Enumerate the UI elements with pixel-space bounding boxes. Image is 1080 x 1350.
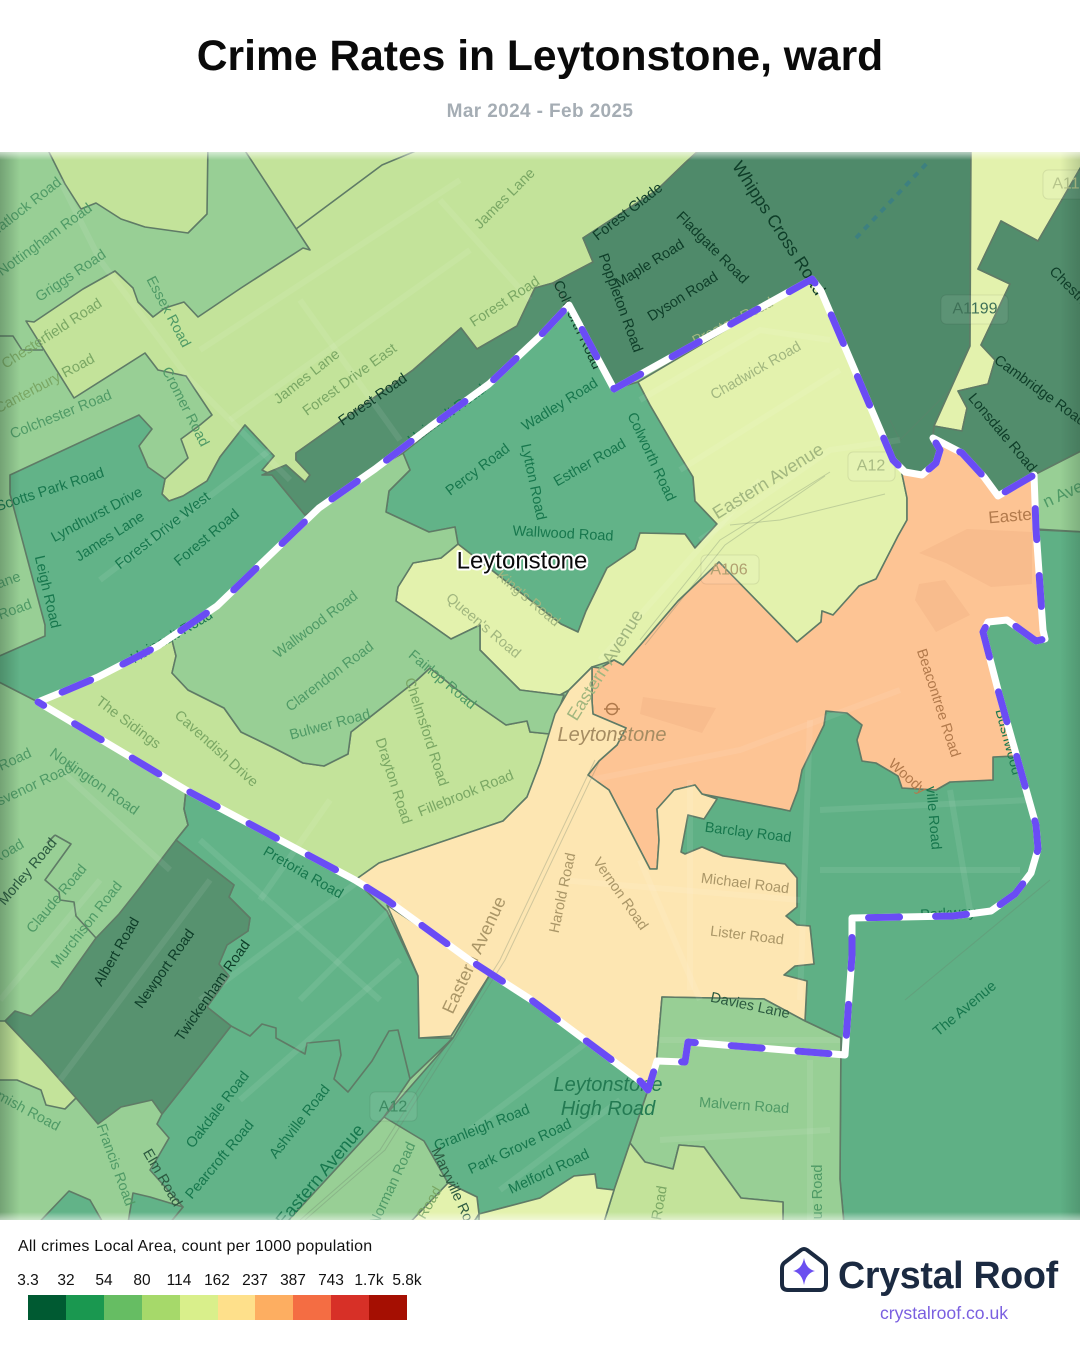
road labels ward north: Chadwick Road — [708, 339, 804, 403]
road labels ward north: Whipps Cross Road — [728, 157, 830, 299]
area: top-right dark Cambridge Road — [933, 160, 1080, 496]
road labels north west: Lyndhurst Drive — [49, 484, 145, 546]
legend scale labels: 5.8k — [392, 1272, 422, 1289]
legend scale labels: 114 — [167, 1272, 191, 1289]
road labels south west: Albert Road — [91, 915, 143, 989]
area: dark Albert Road block — [5, 840, 250, 1124]
legend scale labels: 32 — [57, 1272, 75, 1289]
area: east green — [681, 530, 1080, 1235]
road labels ward north: Wadley Road — [519, 375, 601, 435]
road labels north west: Forest Drive West — [112, 489, 214, 573]
road labels ward north: Maple Road — [613, 236, 687, 292]
road labels south west: Granleigh Road — [432, 1102, 532, 1154]
road labels ward north: Hainault Road — [405, 382, 489, 448]
road labels south east: The Avenue — [930, 978, 1000, 1040]
road labels south west: Road — [414, 1184, 446, 1222]
road labels south west: Claude Road — [24, 861, 90, 937]
station label: Leytonstone High Road: Leytonstone — [554, 1074, 662, 1096]
icon: tube station — [604, 704, 620, 714]
legend scale labels: 80 — [133, 1272, 151, 1289]
road labels north west: Cromer Road — [158, 365, 212, 449]
brand name: Crystal Roof — [838, 1254, 1058, 1296]
title: Crime Rates in Leytonstone, ward — [197, 32, 883, 80]
road labels ward north: Percy Road — [443, 441, 513, 499]
road labels south east: Beacontree Road — [913, 647, 963, 759]
road labels north west: Griggs Road — [33, 247, 109, 305]
road labels ward south west: Bulwer Road — [288, 707, 372, 743]
road labels ward north: Forest Glade — [590, 180, 666, 244]
base area: mid-green areas — [0, 152, 1080, 1220]
road labels ward south west: The Sidings — [93, 694, 163, 752]
road labels south west: Eastern Avenue — [272, 1120, 368, 1230]
road labels north west: Forest Road — [467, 274, 543, 330]
road labels ward south west: Drayton Road — [372, 736, 414, 826]
road labels ward north: Poppleton Road — [595, 251, 645, 355]
area: top-left light green — [48, 152, 209, 234]
station label: Leytonstone: Leytonstone — [558, 724, 666, 746]
road labels south west — [0, 745, 592, 1239]
road labels ward north: King's Road — [493, 568, 563, 630]
road labels ward north: Lonsdale Road — [965, 390, 1039, 476]
road labels south east: Bushwood — [992, 707, 1024, 777]
road labels south west: Pretoria Road — [260, 844, 346, 902]
orange park patches — [640, 529, 1032, 733]
road labels south east: Malvern Road — [698, 1095, 790, 1117]
road labels south west: Elm Road — [139, 1146, 185, 1210]
road labels north west: Forest Drive East — [300, 341, 400, 419]
area: ward interior mid-green Wallwood Road — [172, 453, 564, 766]
road labels ward north: Easte — [988, 505, 1032, 527]
road labels ward north: Eastern Avenue — [709, 439, 827, 523]
area: ward interior green Percy Road — [386, 305, 717, 632]
road labels north west: James Lane — [73, 509, 147, 565]
road labels ward north — [128, 157, 1080, 724]
area: James Lane light green — [26, 140, 710, 501]
road labels south west: Twickenham Road — [172, 938, 254, 1044]
area: southwest light patch — [0, 1021, 76, 1109]
road labels south west: Park Grove Road — [466, 1116, 574, 1178]
road labels south west: Oakdale Road — [183, 1069, 253, 1151]
area: cream zone — [355, 667, 814, 1090]
road labels north west: James Lane — [271, 346, 343, 408]
road shields: A12 — [857, 458, 885, 474]
road labels south west: Norman Road — [367, 1140, 419, 1228]
area: orange high crime zone — [588, 438, 1045, 869]
area: south green Pretoria and Oakdale — [150, 790, 453, 1235]
road labels south east — [438, 647, 1024, 1221]
area: dark Whipps Cross forest — [553, 140, 971, 475]
road labels south west: Murchison Road — [48, 878, 126, 972]
road labels north west: James Lane — [471, 165, 539, 233]
area: top-right pale strip — [934, 140, 1080, 431]
road shields — [370, 170, 1080, 1121]
road labels south west: Newport Road — [132, 926, 198, 1012]
legend scale labels: 162 — [204, 1272, 230, 1289]
road labels ward north: Colworth Road — [549, 278, 605, 372]
bottom left small green patches — [40, 1190, 184, 1220]
road labels north west: Chesterfield Road — [0, 296, 105, 372]
road labels south east: Michael Road — [700, 871, 790, 897]
road shields: A106 — [710, 562, 748, 578]
road labels ward south west: Fairlop Road — [405, 647, 479, 713]
area: Granleigh green — [384, 976, 648, 1214]
area: southern light green — [606, 1143, 784, 1220]
road labels south west: Ashville Road — [266, 1082, 334, 1162]
area: southern pale patches — [412, 1173, 615, 1220]
legend scale labels — [17, 1272, 422, 1289]
area: south cream triangle — [387, 905, 489, 1038]
legend scale labels: 54 — [95, 1272, 113, 1289]
boundary lines between same-colour areas — [0, 145, 1080, 1092]
road labels south east: Barclay Road — [704, 820, 792, 846]
road labels ward south west: Chelmsford Road — [401, 676, 451, 788]
legend scale labels: 743 — [318, 1272, 344, 1289]
place label: Leytonstone ward: Leytonstone — [457, 548, 587, 574]
area: Malvern Road mid-green — [630, 997, 845, 1235]
legend scale labels: 237 — [242, 1272, 268, 1289]
forest stream — [856, 160, 930, 238]
road labels north west: Essex Road — [143, 274, 193, 350]
legend colour bar — [28, 1295, 407, 1320]
road labels north west: Forest Road — [171, 506, 243, 570]
road labels ward north: Esther Road — [551, 436, 629, 490]
road shields: A11 — [1052, 176, 1080, 192]
road labels south east: Harold Road — [547, 852, 579, 934]
railway and track lines — [300, 390, 1050, 1220]
area: ward interior pale Chadwick and Queens Road — [396, 279, 907, 695]
legend title: All crimes Local Area, count per 1000 population — [18, 1238, 372, 1255]
map edge shading — [0, 152, 1080, 1220]
road labels north west — [0, 165, 543, 630]
road labels south east: Woody — [885, 756, 930, 798]
road labels south east: Eastern Avenue — [438, 893, 510, 1017]
road labels ward south west — [93, 588, 516, 826]
road labels north west: Colchester Road — [8, 387, 114, 443]
road labels ward south west: Wallwood Road — [271, 588, 361, 662]
road labels south west: Francis Road — [93, 1122, 137, 1208]
road labels ward north: Fladgate Road — [673, 209, 751, 287]
road labels ward south west: Clarendon Road — [283, 639, 377, 715]
station label: Leytonstone High Road — [554, 1074, 662, 1120]
legend scale labels: 1.7k — [354, 1272, 384, 1289]
road labels ward north: Colworth Road — [623, 410, 679, 504]
road labels north west: Forest Road — [336, 371, 410, 429]
road labels ward north: Queen's Road — [443, 590, 523, 662]
road labels ward north: Eastern Avenue — [563, 606, 647, 724]
legend scale labels: 3.3 — [17, 1272, 39, 1289]
road labels south east: ville Road — [922, 786, 944, 850]
ward boundary — [38, 279, 1045, 1090]
road shields: A1199 — [952, 300, 998, 318]
road labels ward north: Lytton Road — [517, 442, 549, 522]
road labels south east: Davies Lane — [709, 990, 791, 1022]
road labels south east: ue Road — [810, 1165, 826, 1219]
road labels south west: Norlington Road — [46, 745, 142, 819]
road labels south east: Parkway — [920, 905, 977, 923]
road labels ward north: Preston Road — [690, 295, 776, 349]
road labels ward north: Hainault Road — [128, 607, 216, 667]
road shields: A12 — [379, 1098, 407, 1116]
road labels south east: Vernon Road — [589, 855, 651, 933]
subtitle: date range: Mar 2024 - Feb 2025 — [447, 101, 633, 122]
station label: Leytonstone High Road: High Road — [561, 1098, 656, 1120]
road labels ward north: Wallwood Road — [512, 523, 614, 545]
road labels south east: Road — [649, 1185, 671, 1221]
area: dark strip along Forest Road — [262, 283, 569, 515]
brand url: crystalroof.co.uk — [880, 1303, 1008, 1323]
road labels ward south west: Fillebrook Road — [416, 768, 516, 820]
road labels south west: Maryville Road — [427, 1145, 483, 1239]
road labels ward north: Dyson Road — [645, 269, 721, 325]
legend scale labels: 387 — [280, 1272, 306, 1289]
road labels south west: Pearcroft Road — [183, 1118, 257, 1202]
area: ward interior light green Sidings and Fillebrook — [38, 640, 550, 880]
road labels south east: Lister Road — [709, 924, 785, 948]
road labels south west: Melford Road — [506, 1146, 592, 1198]
road network — [0, 180, 1030, 1220]
logo icon: house with star — [782, 1249, 826, 1290]
area: left green Forest Drive — [0, 415, 319, 702]
road labels north west: Leigh Road — [31, 554, 63, 630]
road labels ward south west: Cavendish Drive — [171, 707, 261, 791]
